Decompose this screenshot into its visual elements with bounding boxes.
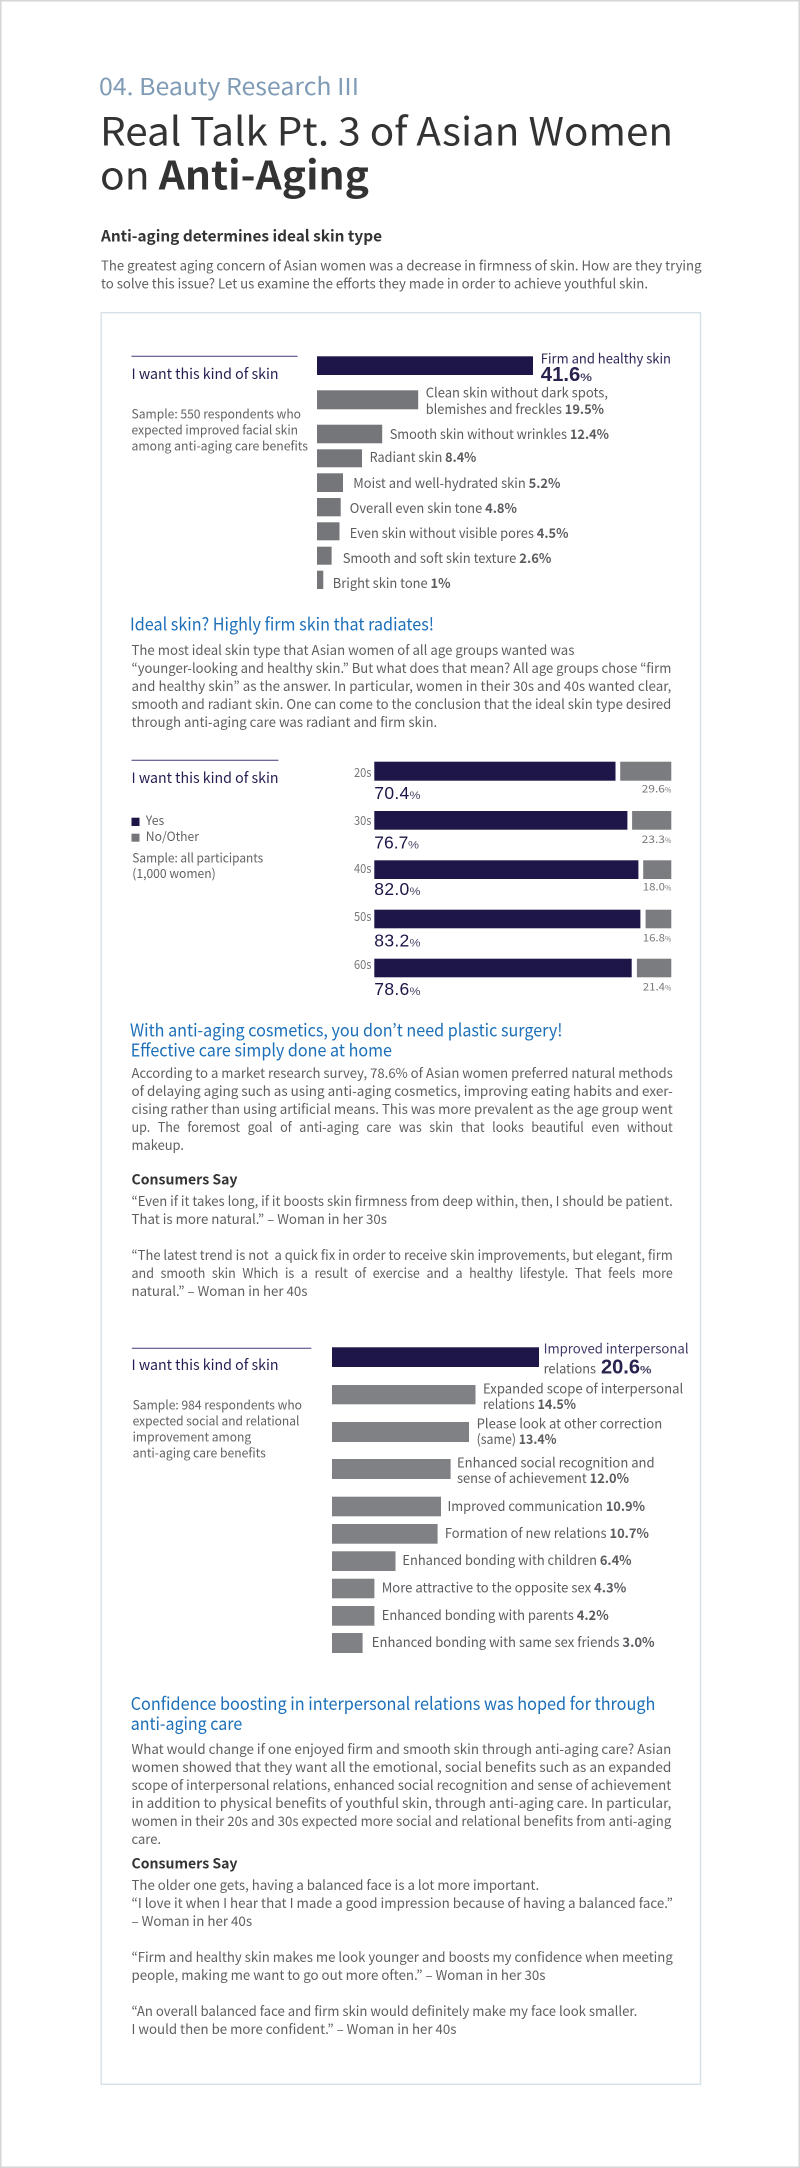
- bar: interpersonal relations: [332, 1337, 689, 1378]
- heading: plastic surgery: [130, 1018, 562, 1063]
- paragraph: confidence: [132, 1739, 672, 1848]
- consumer quotes: I would then be more confident.” – Woman in her 40s: [132, 2019, 456, 2038]
- row: 40s: [354, 858, 671, 899]
- paragraph: ideal skin: The most ideal skin type that Asian women of all age groups wanted was: [132, 640, 574, 659]
- sample note: improvement among: [133, 1426, 251, 1445]
- sample note: expected social and relational: [133, 1410, 300, 1429]
- section eyebrow: 04. Beauty Research III: [99, 68, 359, 102]
- consumers say heading: Consumers Say: [132, 1170, 238, 1190]
- intro paragraph: The greatest aging concern of Asian women was a decrease in firmness of skin. How are they trying: [101, 256, 702, 275]
- bar: other correction: [332, 1413, 662, 1448]
- paragraph: natural methods: up. The foremost goal of anti-aging care was skin that looks beautiful even without: [132, 1117, 673, 1136]
- paragraph: confidence: in addition to physical benefits of youthful skin, through anti-aging care. In particular,: [132, 1793, 671, 1812]
- bar: attractive to opposite sex: More attractive to the opposite sex 4.3%: [382, 1577, 626, 1596]
- row: 60s: %: [410, 986, 421, 998]
- paragraph: ideal skin: “younger-looking and healthy skin.” But what does that mean? All age groups chose “firm: [132, 658, 671, 677]
- paragraph: confidence: women showed that they want all the emotional, social benefits such as an expanded: [132, 1757, 671, 1776]
- bar: new relations: [332, 1523, 649, 1544]
- sample note: Sample: 550 respondents who: [132, 403, 301, 422]
- bar: clean skin: Clean skin without dark spots,: [426, 382, 608, 401]
- consumer quotes: The older one gets, having a balanced face is a lot more important.: [132, 1875, 539, 1894]
- heading: confidence: anti-aging care: [131, 1711, 242, 1736]
- paragraph: natural methods: cising rather than using artificial means. This was more prevalent as the age group went: [132, 1099, 673, 1118]
- consumer quotes: “Firm and healthy skin makes me look younger and boosts my confidence when meeting: [132, 1947, 673, 1966]
- sample note: expected improved facial skin: [132, 419, 298, 438]
- bar: smooth skin: Smooth skin without wrinkles 12.4%: [390, 424, 609, 443]
- sample note: anti-aging care benefits: [133, 1442, 266, 1461]
- subheading: Anti-aging determines ideal skin type: [100, 225, 382, 247]
- chart: social and relational benefits: [132, 1337, 689, 1653]
- consumer quotes: “An overall balanced face and firm skin would definitely make my face look smaller.: [132, 2001, 637, 2020]
- row: 40s: 40s: [354, 858, 372, 877]
- intro paragraph: to solve this issue? Let us examine the efforts they made in order to achieve youthful skin.: [101, 274, 648, 293]
- paragraph: confidence: What would change if one enjoyed firm and smooth skin through anti-aging care? Asian: [132, 1739, 671, 1758]
- consumer quotes: “I love it when I hear that I made a good impression because of having a balanced face.”: [132, 1893, 673, 1912]
- bar: social recognition: Enhanced social recognition and: [457, 1452, 655, 1471]
- bar: firm and healthy skin: Firm and healthy skin: [541, 347, 671, 367]
- chart heading: I want this kind of skin: [132, 767, 278, 788]
- bar: other correction: Please look at other correction: [477, 1413, 662, 1432]
- bar: bonding with friends: Enhanced bonding with same sex friends 3.0%: [372, 1632, 655, 1651]
- bar: firm and healthy skin: %: [580, 372, 592, 384]
- paragraph: confidence: women in their 20s and 30s expected more social and relational benefits from anti-aging: [132, 1811, 672, 1830]
- bar: expanded scope: [332, 1378, 684, 1413]
- heading: confidence: Confidence boosting in interpersonal relations was hoped for through: [131, 1691, 655, 1716]
- title: on Anti-Aging: [100, 145, 369, 201]
- row: 60s: 78.6: [374, 979, 410, 999]
- paragraph: confidence: care.: [132, 1829, 161, 1848]
- row: 30s: %: [408, 839, 419, 851]
- consumer quotes: natural.” – Woman in her 40s: [132, 1281, 308, 1300]
- row: 20s: [354, 762, 671, 803]
- bar: interpersonal relations: %: [640, 1364, 652, 1376]
- legend: No/Other: [146, 826, 199, 845]
- bar: bonding with parents: Enhanced bonding with parents 4.2%: [382, 1605, 609, 1624]
- sample note: (1,000 women): [132, 863, 216, 882]
- row: 60s: [354, 954, 671, 999]
- bar: other correction: (same) 13.4%: [477, 1429, 557, 1448]
- paragraph: ideal skin: smooth and radiant skin. One can come to the conclusion that the ideal skin type desired: [132, 694, 671, 713]
- sample note: Sample: 984 respondents who: [133, 1394, 302, 1413]
- consumer quotes: [132, 1875, 673, 2038]
- chart heading: I want this kind of skin: [132, 1354, 278, 1375]
- sample note: [132, 403, 308, 454]
- paragraph: confidence: scope of interpersonal relations, enhanced social recognition and sense of achievement: [132, 1775, 671, 1794]
- paragraph: natural methods: According to a market research survey, 78.6% of Asian women preferred natural methods: [132, 1063, 673, 1082]
- row: 20s: %: [665, 784, 671, 795]
- row: 20s: 20s: [354, 762, 372, 781]
- sample note: [132, 847, 263, 882]
- consumer quotes: people, making me want to go out more often.” – Woman in her 30s: [132, 1965, 546, 1984]
- sample note: [133, 1394, 302, 1461]
- consumers say heading: Consumers Say: [132, 1854, 238, 1874]
- paragraph: ideal skin: and healthy skin” as the answer. In particular, women in their 30s and 40s wanted clear,: [132, 676, 671, 695]
- row: 50s: 50s: [354, 906, 372, 925]
- bar: social recognition: sense of achievement 12.0%: [457, 1468, 629, 1487]
- bar: expanded scope: relations 14.5%: [483, 1394, 576, 1413]
- bar: firm and healthy skin: 41.6: [541, 364, 580, 386]
- consumer quotes: “Even if it takes long, if it boosts skin firmness from deep within, then, I should be patient.: [132, 1191, 673, 1210]
- row: 30s: [354, 810, 671, 852]
- paragraph: ideal skin: through anti-aging care was radiant and firm skin.: [132, 712, 437, 731]
- sample note: among anti-aging care benefits: [132, 435, 308, 454]
- heading: ideal skin: Ideal skin? Highly firm skin that radiates!: [130, 612, 434, 637]
- chart: ideal skin type: [132, 347, 671, 592]
- bar: social recognition: [332, 1452, 655, 1487]
- bar: pores: Even skin without visible pores 4.5%: [350, 523, 569, 542]
- bar: firm and healthy skin: [317, 347, 671, 386]
- consumer quotes: [132, 1191, 673, 1300]
- bar: bright tone: Bright skin tone 1%: [333, 573, 451, 592]
- row: 30s: 23.3: [642, 832, 665, 847]
- row: 20s: %: [410, 790, 421, 802]
- heading: confidence: [131, 1691, 655, 1736]
- row: 60s: 21.4: [643, 980, 665, 995]
- row: 40s: %: [665, 882, 671, 893]
- bar: communication: [332, 1496, 645, 1516]
- row: 50s: 83.2: [374, 930, 410, 950]
- consumer quotes: and smooth skin Which is a result of exercise and a healthy lifestyle. That feels more: [132, 1263, 673, 1282]
- bar: moist skin: Moist and well-hydrated skin 5.2%: [353, 473, 561, 492]
- paragraph: natural methods: of delaying aging such as using anti-aging cosmetics, improving eating habits and exer-: [132, 1081, 673, 1100]
- row: 20s: 70.4: [374, 783, 410, 803]
- bar: interpersonal relations: Improved interpersonal: [544, 1337, 689, 1357]
- bar: interpersonal relations: 20.6: [601, 1356, 640, 1378]
- row: 50s: %: [665, 934, 671, 945]
- panel: research content: [101, 313, 700, 2084]
- bar: new relations: Formation of new relations 10.7%: [445, 1523, 649, 1542]
- row: 50s: 16.8: [643, 931, 665, 946]
- row: 30s: %: [665, 835, 671, 846]
- bar: communication: Improved communication 10.9%: [448, 1496, 645, 1515]
- chart heading: I want this kind of skin: [132, 363, 278, 384]
- consumer quotes: “The latest trend is not a quick fix in order to receive skin improvements, but elegant, firm: [132, 1245, 673, 1264]
- title: Real Talk Pt. 3 of Asian Women: [100, 102, 673, 158]
- row: 50s: %: [410, 937, 421, 949]
- bar: clean skin: [317, 382, 608, 418]
- bar: texture: Smooth and soft skin texture 2.6%: [343, 548, 552, 567]
- paragraph: natural methods: [132, 1063, 673, 1154]
- bar: even tone: Overall even skin tone 4.8%: [350, 498, 517, 517]
- bar: bonding with children: [332, 1550, 632, 1571]
- row: 40s: %: [410, 886, 421, 898]
- row: 60s: 60s: [354, 954, 372, 973]
- bar: radiant skin: [317, 447, 476, 467]
- bar: radiant skin: Radiant skin 8.4%: [370, 447, 476, 466]
- bar: expanded scope: Expanded scope of interpersonal: [483, 1378, 684, 1397]
- row: 30s: 76.7: [374, 832, 408, 852]
- row: 60s: %: [665, 983, 671, 994]
- heading: plastic surgery: With anti-aging cosmetics, you don’t need plastic surgery!: [130, 1018, 562, 1043]
- title: [100, 102, 673, 201]
- row: 50s: [354, 906, 671, 950]
- chart: yes/no by age: [132, 760, 671, 999]
- consumer quotes: That is more natural.” – Woman in her 30s: [132, 1209, 387, 1228]
- paragraph: ideal skin: [132, 640, 671, 731]
- paragraph: natural methods: makeup.: [132, 1135, 184, 1154]
- row: 40s: 82.0: [374, 879, 410, 899]
- bar: bonding with children: Enhanced bonding with children 6.4%: [402, 1550, 632, 1569]
- legend: Yes: [145, 810, 164, 829]
- bar: clean skin: blemishes and freckles 19.5%: [426, 399, 604, 418]
- bar: interpersonal relations: relations: [544, 1358, 596, 1377]
- consumer quotes: – Woman in her 40s: [132, 1911, 252, 1930]
- row: 20s: 29.6: [642, 781, 665, 796]
- row: 30s: 30s: [354, 810, 372, 829]
- intro paragraph: [101, 256, 702, 293]
- row: 40s: 18.0: [643, 879, 665, 894]
- sample note: Sample: all participants: [132, 847, 263, 866]
- legend: [132, 810, 199, 845]
- heading: plastic surgery: Effective care simply done at home: [131, 1038, 392, 1063]
